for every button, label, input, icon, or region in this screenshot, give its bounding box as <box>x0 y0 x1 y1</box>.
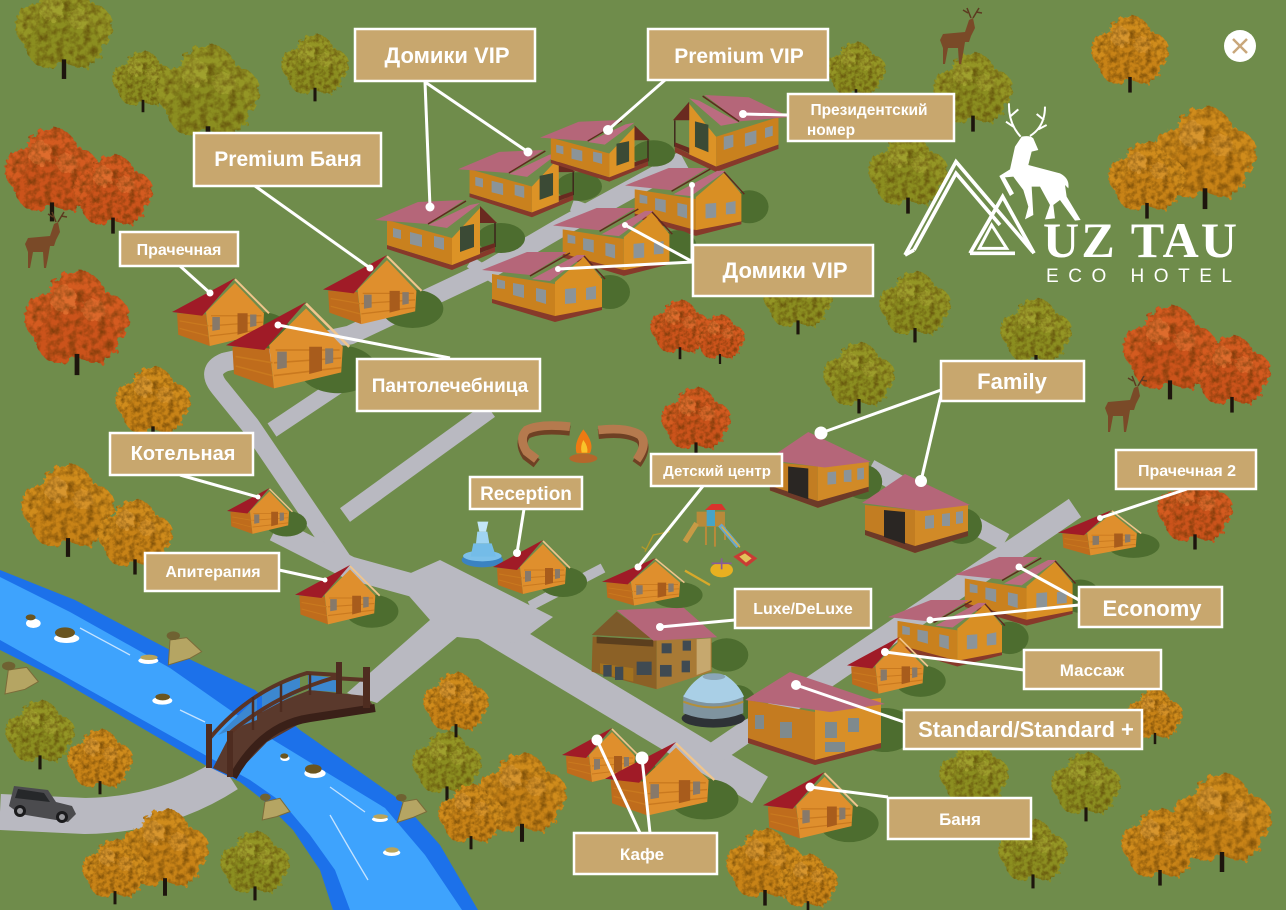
label: Reception: Reception <box>480 484 572 505</box>
logo tagline: ECO HOTEL <box>1046 266 1232 287</box>
label: Массаж: Массаж <box>1060 661 1125 680</box>
label: Luxe/DeLuxe <box>735 589 871 628</box>
log cabins <box>172 255 1160 842</box>
logo: Muz Tau Eco Hotel <box>905 103 1237 287</box>
label: Прачечная <box>120 232 238 266</box>
label: Баня <box>888 798 1031 839</box>
bridge <box>206 662 375 777</box>
label: Premium VIP: Premium VIP <box>674 45 804 68</box>
label: Котельная <box>110 433 253 475</box>
label: Family: Family <box>977 369 1048 394</box>
car <box>9 786 76 823</box>
label: Кафе <box>574 833 717 874</box>
label: Апитерапия: Апитерапия <box>165 564 261 581</box>
deer figures <box>25 8 1147 432</box>
label: Кафе: Кафе <box>620 845 664 864</box>
label: Массаж <box>1024 650 1161 689</box>
houses: Economy <box>888 557 1100 666</box>
label: Детский центр: Детский центр <box>663 463 771 480</box>
yurt <box>682 673 757 728</box>
houses: Family <box>767 432 982 553</box>
label: Апитерапия <box>145 553 279 591</box>
label: Reception <box>470 477 582 509</box>
label: Домики VIP (top): Домики VIP <box>384 43 510 68</box>
label: Домики VIP (right): Домики VIP <box>722 258 848 283</box>
callout lines <box>180 80 1187 833</box>
close button <box>1224 30 1256 62</box>
river rocks <box>2 614 427 856</box>
label: Standard/Standard +: Standard/Standard + <box>918 717 1134 742</box>
label: Economy: Economy <box>1102 596 1202 621</box>
label: Домики VIP (right) <box>693 245 873 296</box>
houses: Домики VIP front row <box>482 168 769 322</box>
label: Детский центр <box>651 454 782 486</box>
label: Family <box>941 361 1084 401</box>
label: Luxe/DeLuxe: Luxe/DeLuxe <box>753 601 853 618</box>
label: Котельная: Котельная <box>131 443 235 465</box>
label: Premium VIP <box>648 29 828 80</box>
label: Premium Баня <box>194 133 381 186</box>
label: Прачечная 2 <box>1116 450 1256 489</box>
label: Президентский номер: номер <box>807 122 855 139</box>
fountain <box>462 522 503 567</box>
callout dots <box>206 110 1103 792</box>
logo deer <box>999 103 1081 221</box>
label: Прачечная 2: Прачечная 2 <box>1138 463 1236 480</box>
campfire and seating <box>522 426 643 464</box>
trees: red-orange <box>5 128 1271 550</box>
roads <box>0 160 1075 816</box>
label: Президентский номер: Президентский <box>810 102 928 119</box>
label: Президентский номер <box>788 94 954 141</box>
river <box>0 570 478 910</box>
houses: Домики VIP with porch <box>375 95 790 270</box>
house: Standard/Standard + <box>745 672 915 765</box>
label: Economy <box>1079 587 1222 627</box>
house: Luxe/DeLuxe <box>592 607 748 689</box>
label: Домики VIP (top) <box>355 29 535 81</box>
label: Premium Баня: Premium Баня <box>214 148 362 171</box>
logo wordmark: UZ TAU <box>1043 212 1237 268</box>
playground <box>642 504 757 585</box>
logo mountains <box>905 162 1034 255</box>
label: Баня: Баня <box>939 810 981 829</box>
label: Пантолечебница <box>357 359 540 411</box>
label: Standard/Standard + <box>904 710 1142 749</box>
label: Прачечная: Прачечная <box>137 242 221 259</box>
label: Пантолечебница: Пантолечебница <box>372 376 529 397</box>
